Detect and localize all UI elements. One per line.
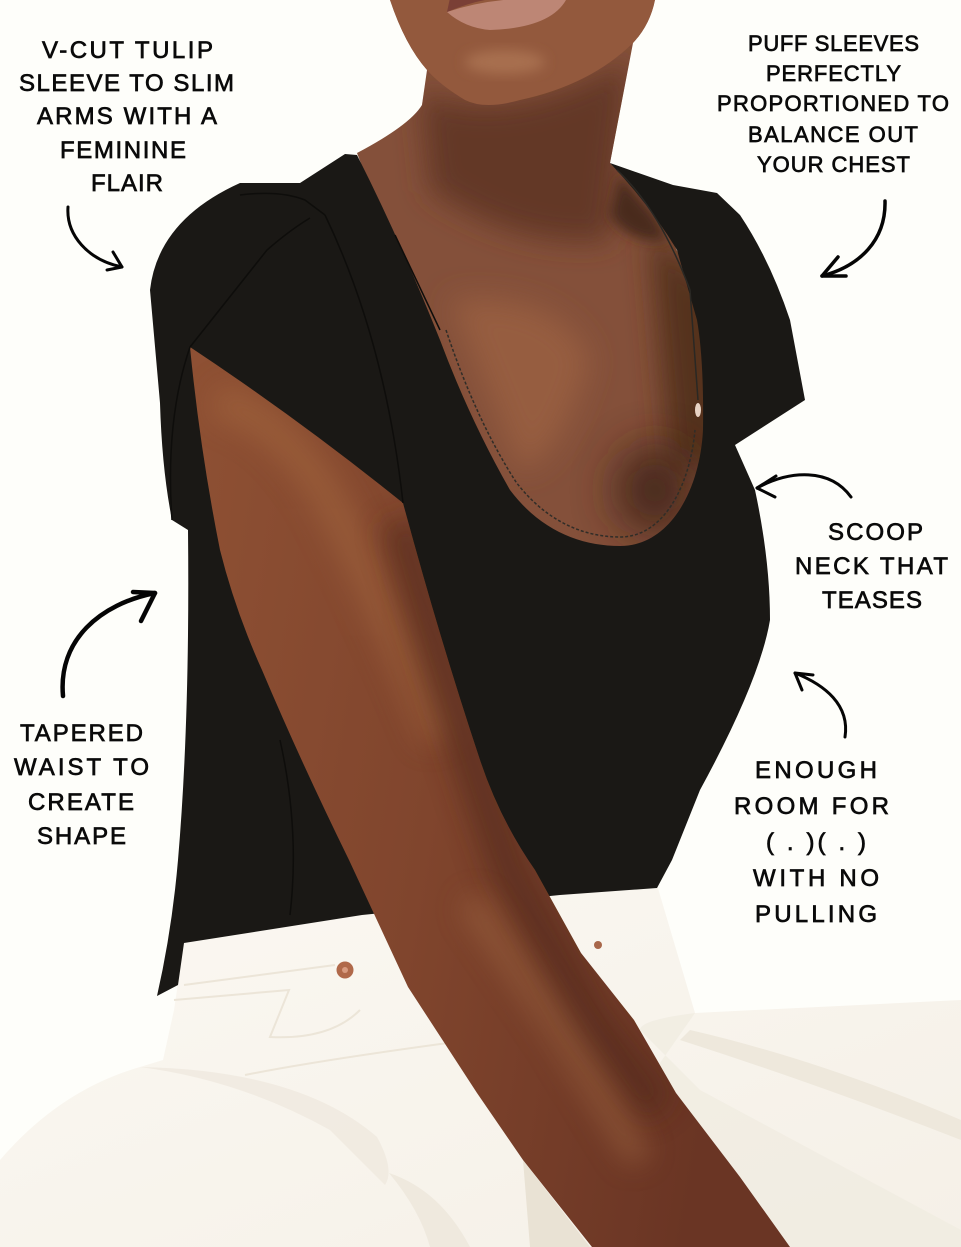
photo: jeans	[0, 885, 961, 1247]
text: bust room: ROOM FOR	[734, 793, 889, 820]
text: scoop neck: NECK THAT	[795, 553, 948, 580]
text: tulip sleeve	[19, 37, 234, 197]
text: tulip sleeve: ARMS WITH A	[37, 103, 217, 130]
text: puff sleeves: BALANCE OUT	[748, 122, 918, 147]
text: bust room: ( . )( . )	[766, 829, 866, 856]
photo: sleeve folds	[170, 170, 698, 915]
text: tapered waist: TAPERED	[20, 720, 143, 747]
text: bust room: WITH NO	[753, 865, 879, 892]
text: tulip sleeve: SLEEVE TO SLIM	[19, 70, 234, 97]
text: tapered waist: SHAPE	[37, 823, 126, 850]
annotation: scoop neck	[795, 519, 948, 614]
arrow: tapered waist	[63, 592, 155, 696]
annotation: tulip sleeve	[19, 37, 234, 197]
annotation: bust room	[734, 757, 889, 928]
text: bust room	[734, 757, 889, 928]
text: scoop neck	[795, 519, 948, 614]
photo: bra strap glint	[695, 403, 701, 417]
arrow: tulip sleeve	[68, 207, 122, 270]
text: puff sleeves: YOUR CHEST	[757, 152, 910, 177]
text: scoop neck: TEASES	[822, 587, 922, 614]
arrow: puff sleeves	[822, 201, 885, 276]
text: puff sleeves	[717, 31, 949, 177]
text: bust room: ENOUGH	[755, 757, 877, 784]
text: tapered waist: CREATE	[28, 789, 134, 816]
arrow: bust room	[795, 673, 846, 737]
text: puff sleeves: PUFF SLEEVES	[748, 31, 919, 56]
text: bust room: PULLING	[755, 901, 877, 928]
text: puff sleeves: PROPORTIONED TO	[717, 91, 949, 116]
annotation: tapered waist	[14, 720, 149, 850]
text: tapered waist: WAIST TO	[14, 754, 149, 781]
photo: neck and chest	[357, 0, 704, 546]
annotation: puff sleeves	[717, 31, 949, 177]
text: puff sleeves: PERFECTLY	[766, 61, 901, 86]
photo: black top	[150, 154, 805, 996]
text: tapered waist	[14, 720, 149, 850]
text: tulip sleeve: V-CUT TULIP	[42, 37, 213, 64]
arrow: scoop neck	[757, 475, 851, 497]
photo: arm	[180, 340, 800, 1247]
text: tulip sleeve: FLAIR	[91, 170, 163, 197]
text: tulip sleeve: FEMININE	[60, 137, 186, 164]
text: scoop neck: SCOOP	[828, 519, 923, 546]
